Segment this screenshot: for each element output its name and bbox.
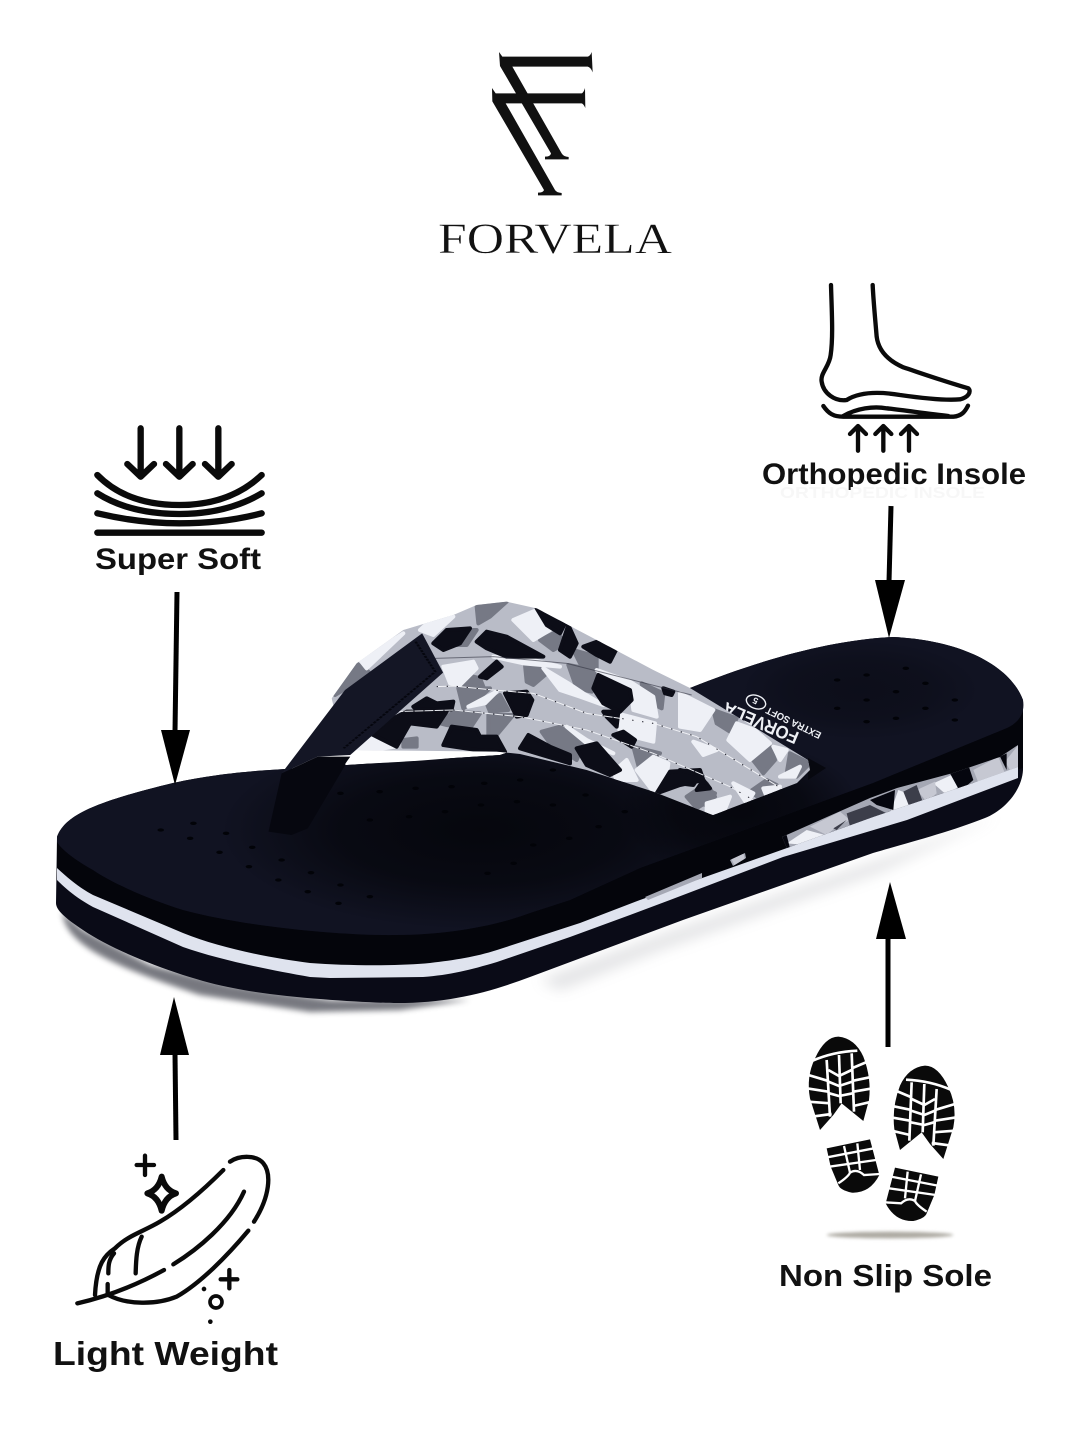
label: Light Weight: Light Weight <box>53 1335 278 1372</box>
toe post <box>269 757 350 835</box>
feature: light weight <box>53 997 278 1372</box>
logo mark: interlocked F F monogram <box>492 52 593 195</box>
strap fold line <box>435 657 692 695</box>
product: camouflage flip flop <box>56 600 1030 1012</box>
top footbed surface <box>57 637 1023 935</box>
footbed perforations <box>157 667 958 905</box>
boot print upper left <box>807 1037 873 1130</box>
boot heel left <box>827 1139 880 1193</box>
arrow: up to sole <box>876 882 906 1047</box>
dark inner strap piece <box>282 633 443 773</box>
footbed brand print: 5 <box>751 695 760 706</box>
footbed brand print: EXTRA SOFT <box>765 704 823 740</box>
arrow: up to toe <box>160 997 189 1140</box>
dark side wall above stripe <box>57 712 1023 965</box>
label: Orthopedic Insole: Orthopedic Insole <box>762 458 1026 491</box>
strap stitching <box>393 686 787 800</box>
wordmark: FORVELA <box>438 216 672 263</box>
camouflage strap <box>320 600 833 820</box>
camouflage side band <box>645 745 1018 900</box>
arrow: down to heel <box>875 506 905 638</box>
icon: boot sole prints <box>807 1037 957 1238</box>
strap end tab <box>808 758 826 780</box>
boot heel right <box>885 1168 938 1221</box>
white midsole stripe <box>57 765 1018 978</box>
footbed opening highlight <box>345 749 495 764</box>
arrow: down to footbed <box>161 592 190 785</box>
print shadow <box>827 1232 953 1238</box>
sole silhouette <box>56 637 1023 1003</box>
boot print upper right <box>891 1066 957 1159</box>
feature: super soft <box>95 428 262 785</box>
icon: compressing layers with down arrows <box>97 428 262 533</box>
feature: orthopedic insole <box>762 285 1026 638</box>
footbed brand print: FORVELA <box>720 698 802 748</box>
footbed shading <box>220 640 980 930</box>
feature: non slip sole <box>779 882 992 1293</box>
logo <box>438 52 672 263</box>
faint label reflection: ORTHOPEDIC INSOLE <box>780 485 985 502</box>
icon: feather with sparkles <box>77 1156 268 1323</box>
label: Non Slip Sole: Non Slip Sole <box>779 1258 992 1293</box>
icon: foot over arched insole <box>821 285 970 451</box>
ground shadow <box>62 815 1000 1012</box>
label: Super Soft: Super Soft <box>95 543 261 576</box>
